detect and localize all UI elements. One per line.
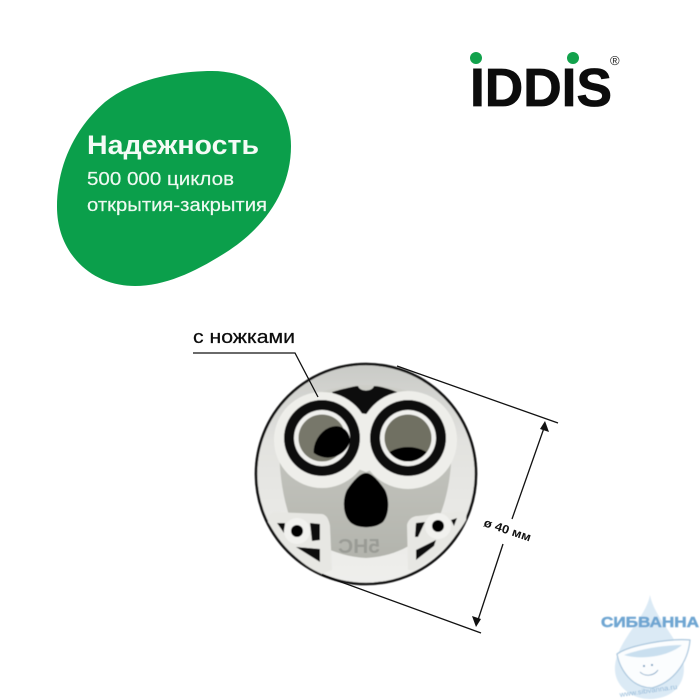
- panel: green blob callout: [57, 71, 291, 286]
- watermark water drop: [615, 595, 684, 699]
- watermark bathtub: [617, 640, 690, 688]
- watermark: Sibvanna: [601, 595, 700, 699]
- lower dimension arrow: [472, 544, 503, 627]
- white seat plate: [274, 391, 457, 489]
- dimension label: ø 40 мм: [482, 516, 533, 544]
- moulded marking: 5HC: [338, 536, 380, 558]
- callout leader line: [193, 353, 318, 397]
- logo: IDDIS: [470, 52, 620, 118]
- central drain opening: [344, 473, 388, 527]
- top extension line: [397, 366, 558, 423]
- watermark url: www.sibvanna.ru: [618, 684, 678, 699]
- cartridge photo: [256, 364, 476, 584]
- left port ring: [284, 400, 360, 476]
- callout label: с ножками: [193, 326, 295, 347]
- logo dot left: [470, 52, 482, 64]
- right port ring: [370, 400, 446, 476]
- inner gray well: [279, 385, 452, 558]
- registered mark: ®: [610, 53, 620, 68]
- text: open-close: открытия-закрытия: [87, 195, 267, 215]
- dimension: diameter 40 mm: [322, 366, 558, 633]
- logo wordmark: IDDIS: [470, 58, 612, 118]
- outer rim disc: [256, 364, 476, 584]
- watermark name: СИБВАННА: [601, 615, 700, 631]
- upper dimension arrow: [512, 421, 549, 519]
- bottom extension line: [322, 575, 481, 633]
- top black recess: [332, 386, 397, 414]
- text: cycles count: 500 000 циклов: [87, 169, 234, 189]
- heading: reliability: Надежность: [87, 130, 259, 160]
- right mounting foot: [407, 510, 467, 570]
- logo dot right: [567, 52, 579, 64]
- callout: with legs: [193, 326, 318, 397]
- green blob background: [57, 71, 291, 286]
- left mounting foot: [268, 512, 332, 574]
